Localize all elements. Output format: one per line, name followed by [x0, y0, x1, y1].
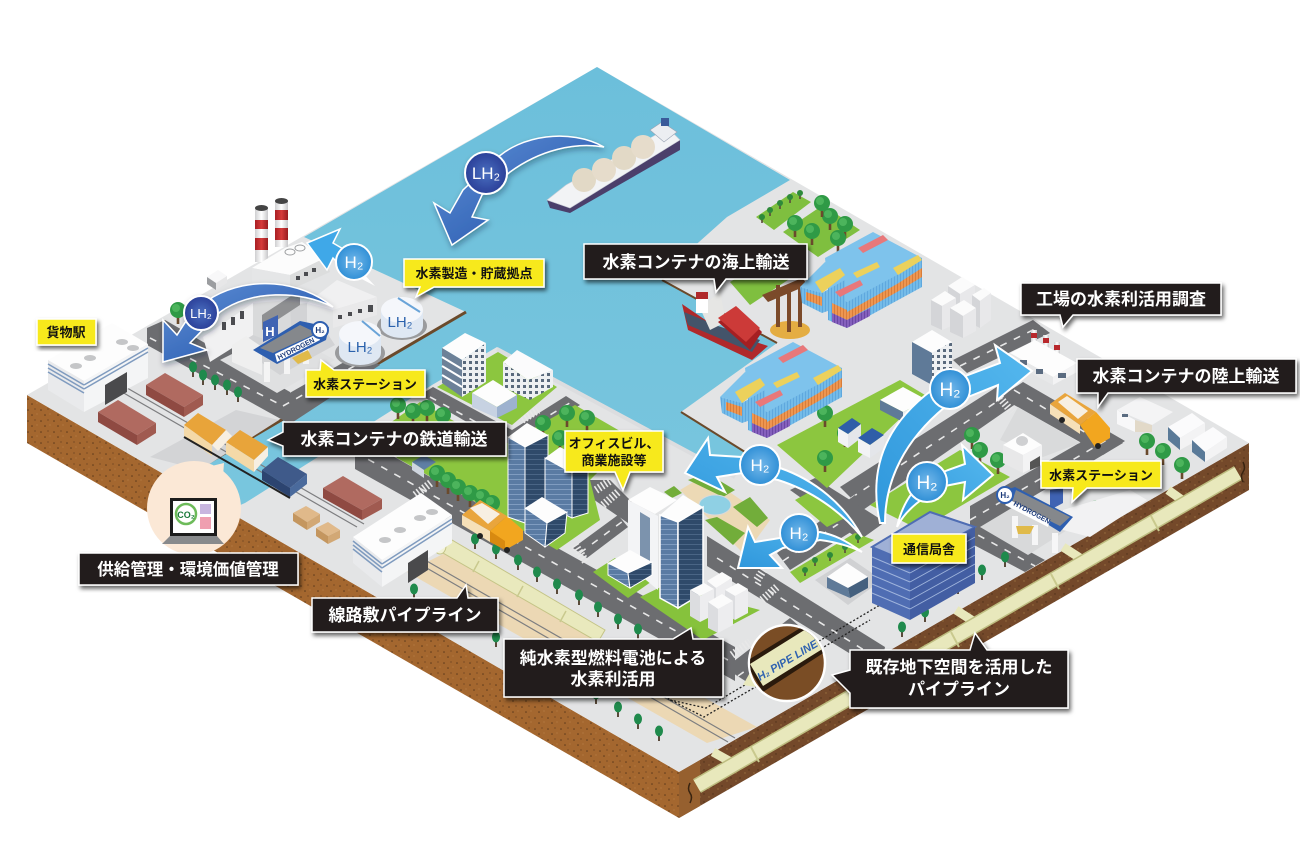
callout: 純水素型燃料電池による水素利活用 — [504, 628, 723, 697]
smokestacks — [255, 198, 288, 262]
LH2 storage tanks: LH₂ — [348, 339, 373, 356]
laptop bubble: CO₂ — [177, 510, 195, 520]
arrow: H2 to factory chimney — [307, 229, 375, 286]
arrow: LH2 plant to cargo station — [163, 284, 333, 362]
callout: 純水素型燃料電池による水素利活用: 純水素型燃料電池による — [520, 649, 706, 668]
label: 通信局舎: 通信局舎 — [903, 542, 955, 557]
apartment buildings north block — [442, 333, 553, 418]
callout: 純水素型燃料電池による水素利活用: 水素利活用 — [570, 670, 656, 689]
callout: 水素コンテナの鉄道輸送 — [268, 422, 506, 456]
road network: right district — [777, 320, 1125, 572]
arrow: H2 to factory right: H₂ — [939, 380, 961, 401]
earth: left face — [27, 395, 679, 818]
factory right — [1010, 330, 1077, 385]
freight train — [184, 413, 307, 498]
factory complex — [203, 242, 377, 375]
laptop bubble — [147, 461, 241, 555]
arrow: H2 to factory chimney: H₂ — [345, 253, 363, 272]
hydrogen station right: H₂ — [1000, 491, 1010, 500]
brick containers — [98, 373, 382, 520]
white cluster northeast — [931, 277, 991, 338]
crosswalks — [415, 398, 1012, 655]
trees: roadside rows — [189, 362, 1009, 741]
building northeast — [912, 330, 952, 385]
cargo station right — [353, 493, 452, 587]
arrow: H2 to station right — [897, 445, 993, 527]
low building by green — [815, 558, 882, 605]
light gray yard — [150, 410, 279, 470]
label: オフィスビル、商業施設等: オフィスビル、 — [569, 436, 659, 451]
pipeline: surface section — [434, 538, 605, 642]
hydrogen station right — [980, 487, 1147, 555]
cargo station left — [48, 323, 148, 412]
callout: 既存地下空間を活用したパイプライン — [832, 633, 1068, 708]
label: オフィスビル、商業施設等 — [565, 431, 663, 490]
callout: 水素コンテナの陸上輸送: 水素コンテナの陸上輸送 — [1092, 367, 1280, 386]
container ship — [682, 292, 768, 360]
label: 水素ステーション right — [1041, 461, 1161, 502]
office towers centre — [608, 487, 703, 608]
truck upper right — [1050, 393, 1110, 449]
arrow: H2 to offices: H₂ — [751, 456, 769, 475]
earth: corner edge — [679, 760, 700, 818]
callout: 工場の水素利活用調査: 工場の水素利活用調査 — [1036, 290, 1206, 309]
label: 水素製造・貯蔵拠点 — [404, 259, 544, 297]
label: 通信局舎 — [892, 534, 966, 563]
bay water — [200, 67, 790, 512]
truck lower left — [462, 500, 523, 553]
label: 水素ステーション left — [306, 360, 425, 397]
arrow: H2 to station right: H₂ — [916, 473, 938, 494]
arrow: H2 to fuel cell: H₂ — [790, 524, 808, 543]
underground route dotted lines — [657, 602, 885, 717]
blue house behind callout — [412, 455, 436, 478]
trees: parks and blocks — [170, 190, 1190, 576]
road network: factory area — [147, 320, 380, 424]
hydrogen station right: HYDROGEN — [1012, 501, 1051, 526]
label: 水素ステーション left: 水素ステーション — [313, 377, 417, 392]
callout: 供給管理・環境価値管理 — [79, 553, 298, 585]
hydrogen station left: H — [265, 324, 275, 339]
callout: 既存地下空間を活用したパイプライン: 既存地下空間を活用した — [866, 657, 1052, 677]
LH2 storage tanks — [335, 297, 427, 367]
hydrogen station left: H₂ — [315, 326, 325, 335]
railway tracks — [108, 381, 735, 742]
callout: 水素コンテナの陸上輸送 — [1077, 359, 1296, 407]
cardboard boxes — [293, 506, 340, 544]
callout: 線路敷パイプライン — [312, 585, 498, 632]
road network: main road — [355, 387, 885, 684]
park with fountain — [664, 473, 770, 555]
hydrogen station left — [232, 315, 329, 382]
pipe magnifier circle — [743, 622, 828, 701]
label: 貨物駅 — [37, 319, 96, 345]
arrow: LH2 tanker to bay — [434, 136, 604, 245]
fenced plant — [1000, 407, 1080, 473]
rail bed beige strip — [407, 553, 757, 743]
arrow: H2 to offices — [685, 438, 862, 537]
low building east — [880, 387, 927, 422]
arrow: H2 to fuel cell — [738, 514, 862, 568]
wharf edges — [196, 280, 777, 470]
LH2 storage tanks: LH₂ — [388, 314, 413, 331]
east buildings — [1117, 397, 1227, 462]
container stack: upper — [800, 232, 922, 328]
container stack: lower — [720, 342, 842, 438]
callout: 水素コンテナの海上輸送: 水素コンテナの海上輸送 — [602, 253, 790, 272]
arrow: LH2 tanker to bay: LH₂ — [472, 164, 500, 183]
callout: 線路敷パイプライン: 線路敷パイプライン — [328, 605, 482, 625]
earth: right face — [679, 443, 1249, 818]
ground surface — [27, 67, 1249, 772]
callout: 供給管理・環境価値管理: 供給管理・環境価値管理 — [97, 559, 279, 579]
sea wall strip — [497, 349, 735, 477]
crane — [762, 278, 810, 339]
blue roof houses — [838, 418, 884, 458]
office towers west — [508, 423, 588, 547]
callout: 既存地下空間を活用したパイプライン: パイプライン — [908, 680, 1010, 699]
arrow: LH2 plant to cargo station: LH₂ — [190, 306, 212, 321]
LNG tanker — [547, 118, 680, 213]
hydrogen station left: HYDROGEN — [277, 337, 316, 362]
callout: 水素コンテナの鉄道輸送: 水素コンテナの鉄道輸送 — [300, 430, 488, 449]
pipe magnifier circle: H₂ PIPE LINE — [755, 638, 821, 684]
label: 水素製造・貯蔵拠点: 水素製造・貯蔵拠点 — [415, 266, 533, 281]
label: オフィスビル、商業施設等: 商業施設等 — [581, 453, 647, 468]
callout: 工場の水素利活用調査 — [1021, 283, 1221, 327]
pipeline: underground main — [688, 462, 1244, 803]
callout: 水素コンテナの海上輸送 — [584, 244, 807, 292]
label: 水素ステーション right: 水素ステーション — [1049, 468, 1153, 483]
green blocks — [380, 192, 1010, 640]
arrow: H2 to factory right — [876, 345, 1032, 523]
label: 貨物駅: 貨物駅 — [46, 325, 86, 340]
white cluster centre — [690, 572, 748, 633]
communications building — [872, 512, 975, 620]
